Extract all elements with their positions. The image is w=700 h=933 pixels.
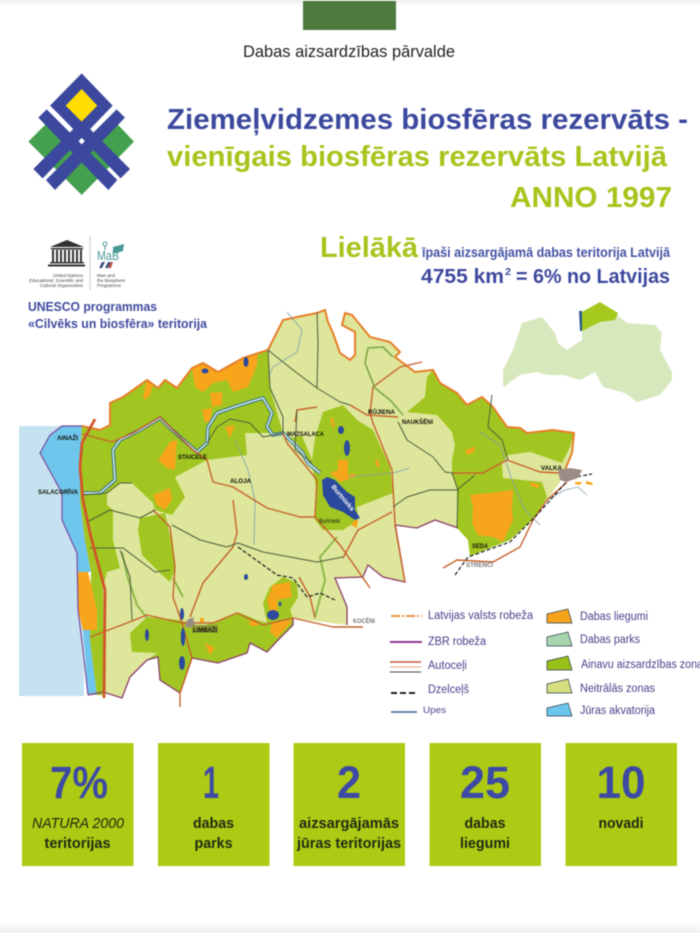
map coastal highway bbox=[80, 419, 105, 698]
icon: biosphere reserve logo bbox=[28, 73, 134, 195]
stat card: marine territories bbox=[294, 743, 405, 866]
map place names: Burtnieks bbox=[329, 484, 356, 513]
map Limbaži label background bbox=[192, 625, 218, 633]
map place names: VALKA bbox=[541, 465, 562, 472]
largest territory statement: īpaši aizsargājamā dabas teritorija Latvijā bbox=[421, 245, 670, 260]
stat card: marine territories: 2 bbox=[337, 757, 361, 808]
largest territory statement: = 6% no Latvijas bbox=[516, 266, 670, 288]
map neutral zone base bbox=[80, 310, 574, 698]
title: ANNO 1997 bbox=[510, 182, 672, 214]
map place names: ALOJA bbox=[230, 478, 251, 485]
stat card: nature reserves: liegumi bbox=[460, 835, 510, 852]
title: Ziemeļvidzemes biosfēras rezervāts - bbox=[167, 104, 688, 136]
map place names: RŪJIENA bbox=[368, 408, 395, 416]
UNESCO programme text bbox=[28, 299, 208, 331]
map place names: AINAŽI bbox=[57, 433, 78, 442]
map nature reserves bbox=[78, 353, 593, 655]
icon: UNESCO and MAB logos: Cultural Organization bbox=[40, 283, 83, 288]
map rivers bbox=[82, 312, 587, 618]
map sea bbox=[19, 426, 84, 696]
stat card: nature reserves: dabas bbox=[464, 815, 506, 832]
organisation name: Dabas aizsardzības pārvalde bbox=[243, 42, 455, 61]
legend: zone types: Jūras akvatorija bbox=[580, 705, 656, 717]
title bbox=[167, 104, 688, 214]
map place names: MAZSALACA bbox=[287, 431, 324, 438]
stat card: municipalities: 10 bbox=[596, 757, 646, 808]
map lakes bbox=[145, 357, 360, 670]
stat card: municipalities bbox=[566, 743, 677, 866]
stat card: marine territories: aizsargājamās bbox=[299, 815, 399, 832]
largest territory statement: 4755 km bbox=[421, 266, 504, 288]
legend: line types: Upes bbox=[423, 705, 446, 716]
map territory border bbox=[82, 310, 574, 470]
legend: line types: ZBR robeža bbox=[428, 636, 487, 648]
header green block bbox=[303, 1, 396, 30]
icon: UNESCO and MAB logos: Man and bbox=[97, 273, 115, 278]
stat card: nature park: parks bbox=[194, 835, 232, 852]
map landscape protection zones bbox=[80, 350, 574, 695]
stat card: nature park: dabas bbox=[193, 815, 234, 832]
stat card: nature reserves bbox=[430, 743, 541, 866]
legend: line types: Latvijas valsts robeža bbox=[428, 610, 534, 622]
icon: UNESCO and MAB logos: MaB bbox=[97, 248, 119, 263]
icon: UNESCO and MAB logos: Educational, Scientific and bbox=[29, 278, 83, 283]
inset map: Latvia bbox=[503, 302, 672, 402]
stat card: Natura 2000: teritorijas bbox=[44, 835, 110, 852]
map roads bbox=[82, 312, 567, 707]
legend: line types: Autoceļi bbox=[428, 660, 467, 672]
largest territory statement: Lielākā bbox=[320, 232, 419, 264]
map place names: STRENČI bbox=[466, 560, 493, 569]
legend: zone types bbox=[547, 609, 700, 717]
stat card: marine territories: jūras teritorijas bbox=[296, 835, 401, 852]
legend: line types bbox=[390, 610, 534, 716]
stat card: Natura 2000 bbox=[22, 743, 134, 866]
stat card: nature park bbox=[158, 743, 270, 866]
stat card: municipalities: novadi bbox=[598, 815, 644, 832]
legend: line types: Dzelceļš bbox=[428, 684, 469, 696]
map place names: KOCĒNI bbox=[353, 617, 375, 625]
icon: UNESCO and MAB logos bbox=[29, 236, 126, 290]
map towns bbox=[185, 468, 582, 628]
icon: UNESCO and MAB logos: the Biosphere bbox=[97, 278, 126, 283]
icon: UNESCO and MAB logos: United Nations bbox=[53, 273, 84, 278]
map place names: LIMBAŽI bbox=[193, 625, 217, 634]
map place names: SEDA bbox=[472, 543, 488, 550]
stat card: nature park: 1 bbox=[203, 757, 219, 808]
map place names: SALACGRĪVA bbox=[38, 488, 78, 496]
map neutral patches bbox=[107, 452, 562, 516]
icon: UNESCO and MAB logos: Programme bbox=[97, 283, 121, 288]
map place names: STAICELE bbox=[178, 454, 208, 461]
map place names: Burtnieki bbox=[319, 519, 340, 525]
map place names: NAUKŠĒNI bbox=[402, 417, 433, 426]
title: vienīgais biosfēras rezervāts Latvijā bbox=[167, 141, 668, 173]
largest territory statement: 2 bbox=[505, 267, 511, 278]
UNESCO programme text: «Cilvēks un biosfēra» teritorija bbox=[28, 316, 208, 331]
map railways bbox=[238, 474, 592, 600]
stat card: Natura 2000: 7% bbox=[50, 757, 108, 808]
stat card: Natura 2000: NATURA 2000 bbox=[32, 815, 125, 832]
map place names bbox=[38, 408, 562, 634]
UNESCO programme text: UNESCO programmas bbox=[28, 299, 157, 314]
map protected-landscape line bbox=[365, 347, 403, 415]
map marine zone bbox=[40, 426, 97, 695]
largest territory statement bbox=[320, 232, 670, 288]
legend: zone types: Dabas liegumi bbox=[580, 611, 648, 623]
legend: zone types: Dabas parks bbox=[580, 634, 640, 646]
stat card: nature reserves: 25 bbox=[460, 757, 510, 808]
legend: zone types: Neitrālās zonas bbox=[580, 683, 655, 695]
map: biosphere reserve territory bbox=[19, 310, 593, 707]
